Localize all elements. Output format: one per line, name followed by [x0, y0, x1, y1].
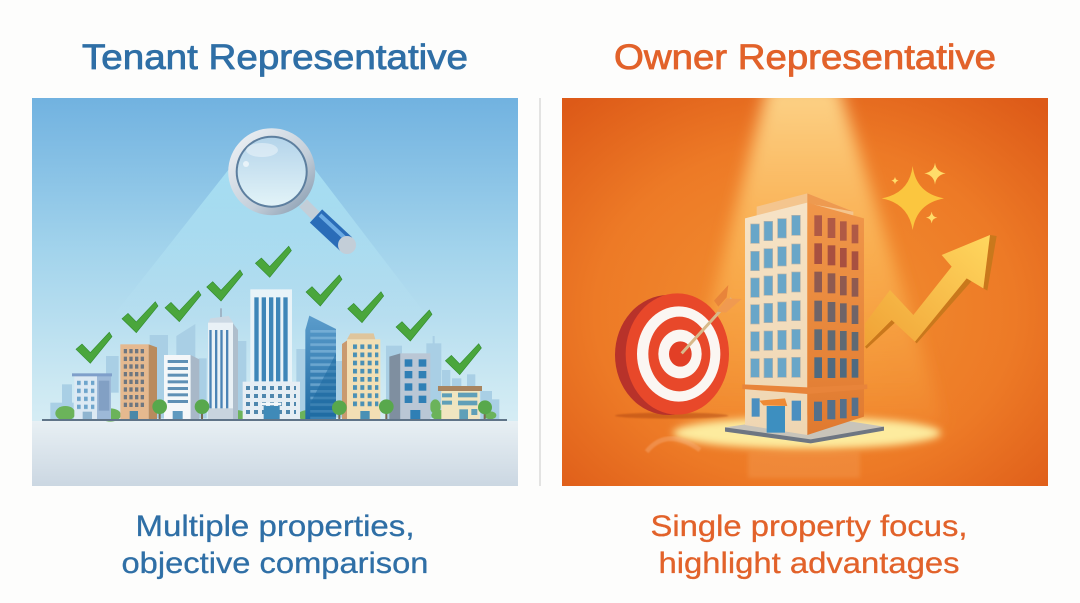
green check marks — [76, 246, 481, 375]
divider — [540, 98, 541, 486]
icon: target with arrow — [615, 285, 742, 415]
building 2 — [120, 344, 157, 419]
icon: magnifying glass — [228, 128, 356, 254]
ground plane — [32, 421, 518, 486]
building 8 — [389, 353, 430, 419]
panel: owner representative spotlight scene — [562, 85, 1048, 486]
building 7 — [342, 333, 380, 419]
target shadow — [615, 413, 728, 419]
building 5 tower — [243, 289, 300, 419]
distant skyline — [50, 324, 499, 419]
building 9 — [438, 386, 482, 419]
panel: tenant representative city scene — [32, 98, 518, 486]
title: Tenant Representative: Tenant Representative — [82, 38, 468, 77]
building 3 — [164, 355, 199, 419]
caption: owner representative: highlight advantages — [658, 547, 960, 580]
left face windows — [751, 215, 800, 378]
icon: sparkle stars — [882, 163, 946, 230]
icon: rising arrow — [865, 235, 997, 349]
ground floor — [752, 398, 858, 433]
magnifier light beam — [164, 170, 378, 254]
light pool — [673, 417, 941, 449]
building 4 — [208, 308, 238, 419]
bushes — [55, 399, 496, 422]
building 6 glass — [305, 316, 336, 419]
caption: tenant representative: Multiple properties, — [136, 510, 414, 543]
base plinth — [725, 415, 884, 443]
mid-floor band — [742, 384, 867, 394]
caption: tenant representative: objective comparison — [122, 547, 428, 580]
street trees — [152, 399, 492, 419]
street line — [42, 419, 507, 421]
city skyline — [42, 289, 507, 422]
scene artwork — [615, 163, 997, 452]
caption: owner representative — [650, 510, 968, 580]
building reflection — [748, 452, 860, 478]
office building — [725, 193, 884, 443]
caption: tenant representative — [122, 510, 428, 580]
title: Owner Representative: Owner Representative — [614, 38, 996, 77]
building 1 — [72, 373, 112, 419]
spotlight beam — [694, 98, 932, 414]
caption: owner representative: Single property focus, — [650, 510, 968, 543]
target reflection — [647, 439, 700, 452]
right face windows — [814, 215, 858, 378]
